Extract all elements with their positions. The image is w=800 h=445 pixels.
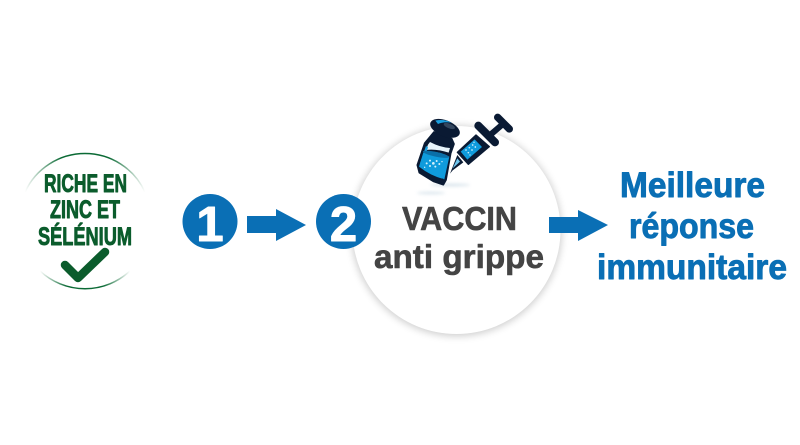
badge top arc	[25, 153, 145, 192]
icon: vial and syringe	[417, 115, 509, 194]
step number 2: 2	[330, 198, 357, 252]
badge text: RICHE EN	[44, 170, 127, 198]
vial	[417, 115, 463, 185]
vaccine heading: VACCIN	[402, 200, 517, 237]
badge text: SÉLÉNIUM	[38, 222, 132, 251]
result text: meilleure réponse immunitaire: réponse	[629, 207, 754, 246]
badge: riche en zinc et sélénium	[25, 153, 145, 289]
result text: meilleure réponse immunitaire: Meilleure	[620, 166, 765, 205]
badge bottom arc	[40, 271, 130, 289]
step number 1: 1	[196, 198, 224, 252]
arrow: vaccine to result	[549, 210, 608, 241]
vaccine subheading: anti grippe	[374, 238, 544, 275]
badge text: ZINC ET	[50, 196, 120, 224]
result text: meilleure réponse immunitaire: immunitaire	[597, 248, 787, 287]
syringe	[450, 117, 509, 174]
badge text	[38, 170, 132, 251]
panel: vaccine circle	[352, 126, 562, 336]
step number 1	[182, 194, 238, 252]
result text: meilleure réponse immunitaire	[597, 166, 787, 287]
icon: check mark	[65, 252, 105, 278]
icon shadows	[417, 184, 470, 194]
arrow: step 1 to step 2	[247, 209, 306, 241]
step number 2	[316, 194, 371, 252]
